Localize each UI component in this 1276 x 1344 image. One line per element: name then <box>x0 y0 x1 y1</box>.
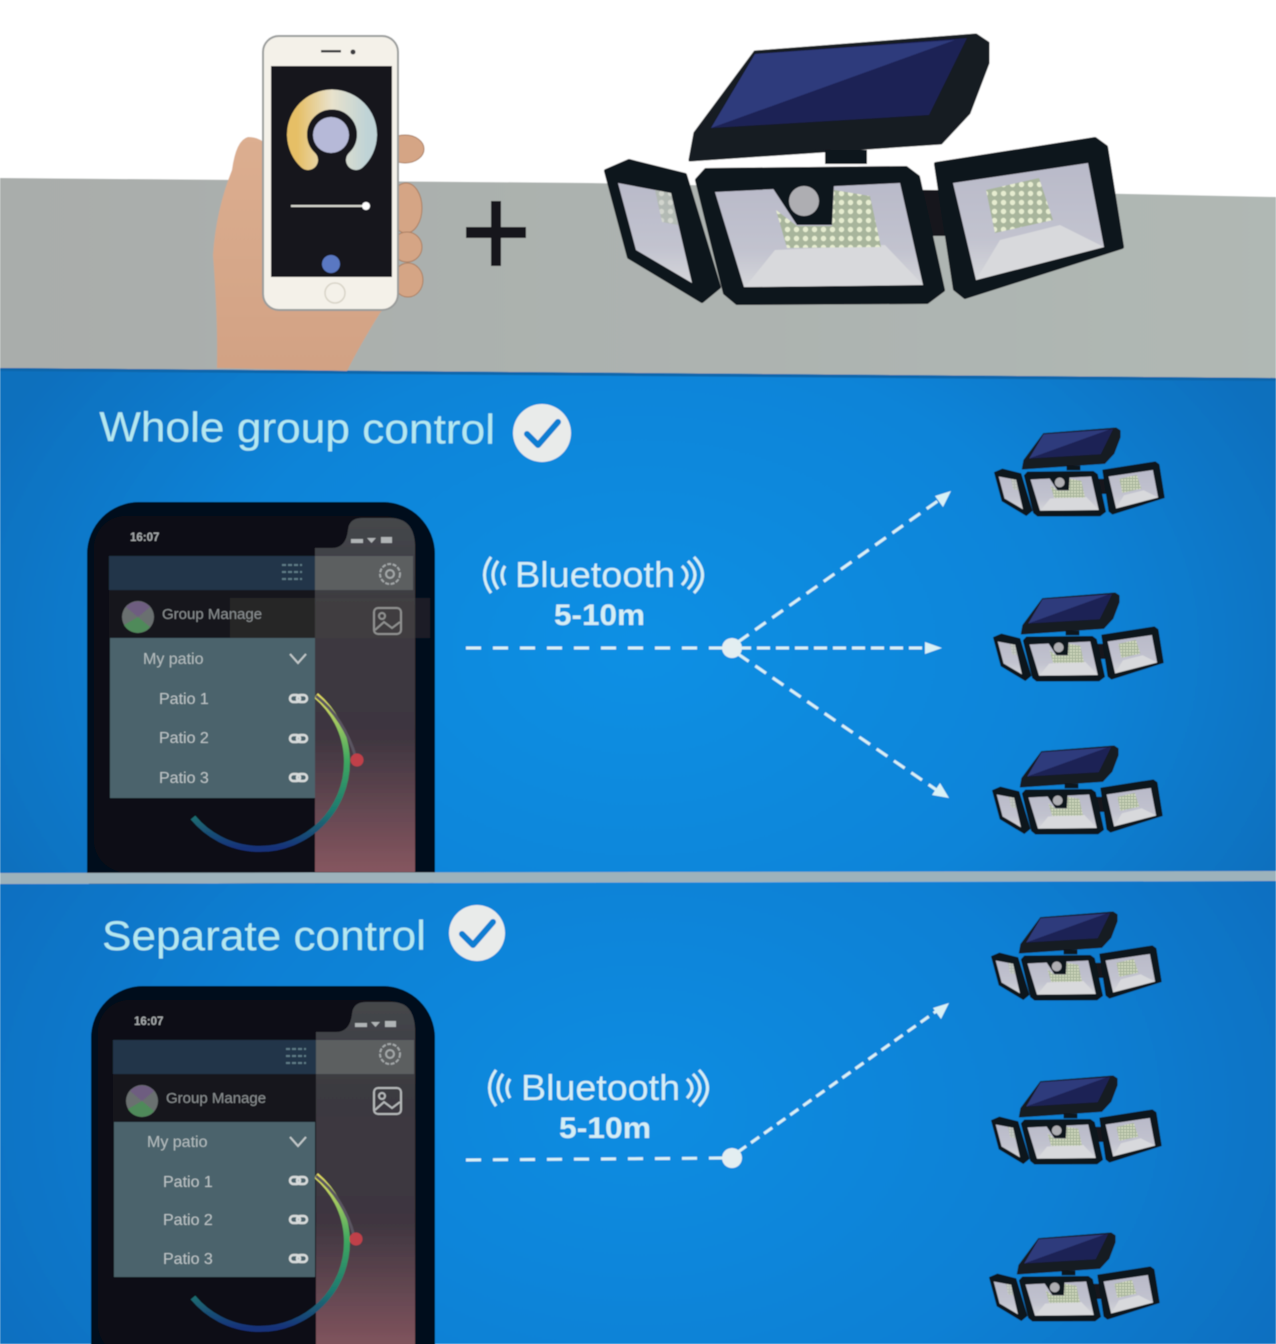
app button <box>322 255 340 273</box>
heading: separate control: Separate control <box>102 912 426 959</box>
dropdown panel <box>114 1122 315 1277</box>
icon: settings gear <box>380 564 400 584</box>
solar lamp product <box>606 35 1122 303</box>
dropdown panel: Patio 1 <box>163 1174 213 1191</box>
phone: group manage app <box>91 986 435 1344</box>
group manage row: Group Manage <box>162 606 262 623</box>
group manage row <box>113 1074 316 1122</box>
dropdown panel: Patio 1 <box>159 691 209 708</box>
bluetooth label: Bluetooth <box>515 554 675 595</box>
group manage row <box>109 590 430 638</box>
brightness slider <box>291 202 370 210</box>
colour wheel <box>193 695 364 849</box>
dropdown panel: My patio <box>147 1134 208 1151</box>
bluetooth label: 5-10m <box>554 599 645 632</box>
earpiece and camera <box>321 50 356 54</box>
lamp 2 <box>994 593 1163 681</box>
panel: separate control <box>0 881 1276 1344</box>
dropdown panel: Patio 2 <box>159 730 209 747</box>
dial knob <box>313 117 349 153</box>
icon: settings gear <box>380 1044 400 1064</box>
panel: whole group control <box>0 368 1276 922</box>
bluetooth label: 5-10m <box>559 1112 651 1145</box>
dropdown panel <box>110 638 315 798</box>
plus sign <box>466 201 526 266</box>
colour wheel <box>193 1175 362 1329</box>
fingers <box>386 135 424 297</box>
status bar time: 16:07 <box>134 1016 163 1028</box>
lamp 2 <box>992 1076 1161 1164</box>
lamp 1 <box>992 912 1161 1000</box>
phone: group manage app <box>87 502 435 922</box>
home button <box>325 283 345 303</box>
status bar time: 16:07 <box>130 532 159 544</box>
dropdown panel: Patio 3 <box>159 770 209 787</box>
heading: whole group control: Whole group control <box>99 403 495 453</box>
icon: check badge <box>513 404 571 462</box>
dropdown panel: My patio <box>143 651 204 668</box>
divider band <box>0 871 1276 884</box>
icon: check badge <box>449 905 505 961</box>
phone body <box>263 36 398 310</box>
hand holding phone <box>213 36 424 371</box>
background: grey band <box>0 178 1276 385</box>
group manage row: Group Manage <box>166 1090 266 1107</box>
dropdown panel: Patio 3 <box>163 1251 213 1268</box>
dropdown panel: Patio 2 <box>163 1212 213 1229</box>
signal arrow <box>466 1003 949 1168</box>
app top bar <box>109 556 413 590</box>
bluetooth label <box>484 554 702 632</box>
lamp 3 <box>993 746 1162 834</box>
colour temperature arc <box>297 100 367 160</box>
signal arrows <box>466 491 951 798</box>
icon: picture <box>374 1088 401 1114</box>
phone screen <box>271 66 392 277</box>
hand <box>213 137 400 371</box>
status icons <box>355 1021 396 1027</box>
bluetooth label: Bluetooth <box>521 1067 680 1108</box>
app top bar <box>113 1040 414 1074</box>
bluetooth label <box>490 1067 708 1145</box>
status icons <box>351 537 392 543</box>
lamp 3 <box>990 1233 1159 1321</box>
icon: picture <box>374 608 401 634</box>
lamp 1 <box>995 428 1164 516</box>
